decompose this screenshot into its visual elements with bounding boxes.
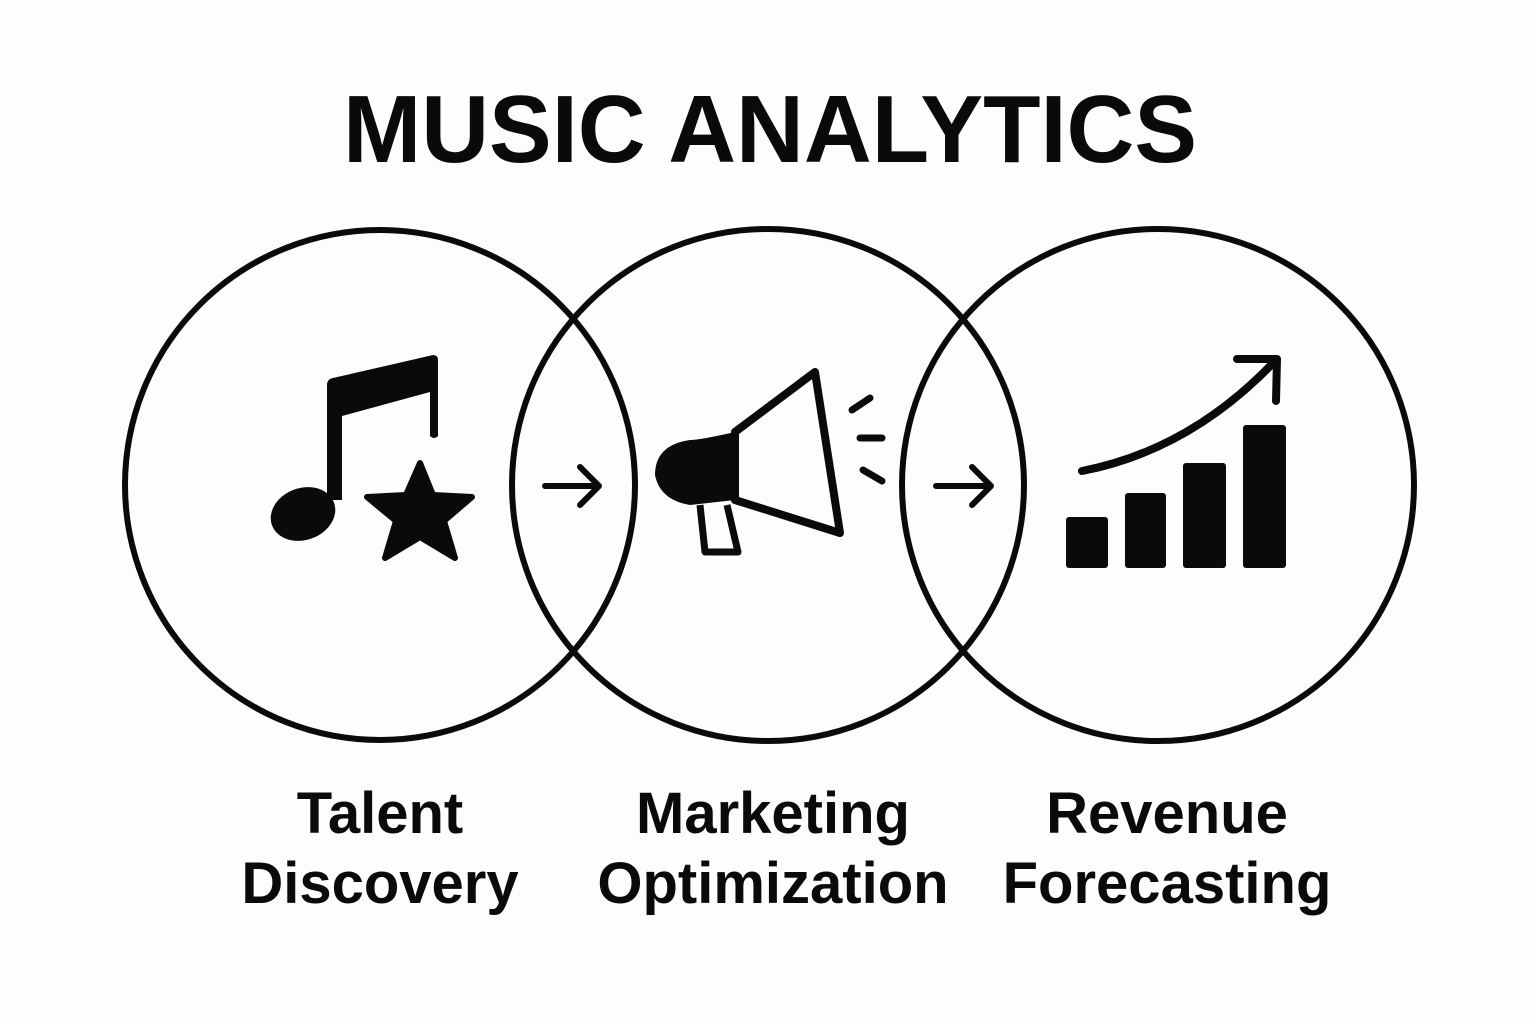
- icon: megaphone: [655, 372, 882, 552]
- title: MUSIC ANALYTICS: [343, 76, 1197, 183]
- label: Revenue Forecasting: Forecasting: [1003, 851, 1331, 916]
- icon: music note with star: [263, 355, 472, 558]
- label: Revenue Forecasting: Revenue: [1046, 781, 1288, 846]
- arrow 1: [545, 467, 599, 505]
- label: Revenue Forecasting: [1003, 781, 1331, 916]
- label: Talent Discovery: Discovery: [241, 851, 519, 916]
- label: Marketing Optimization: [597, 781, 949, 916]
- label: Marketing Optimization: Marketing: [636, 781, 910, 846]
- label: Talent Discovery: Talent: [297, 781, 463, 846]
- icon: bar chart with trend arrow: [1066, 359, 1286, 568]
- arrow 2: [936, 467, 991, 505]
- label: Talent Discovery: [241, 781, 519, 916]
- label: Marketing Optimization: Optimization: [597, 851, 949, 916]
- venn circles: [125, 229, 1414, 741]
